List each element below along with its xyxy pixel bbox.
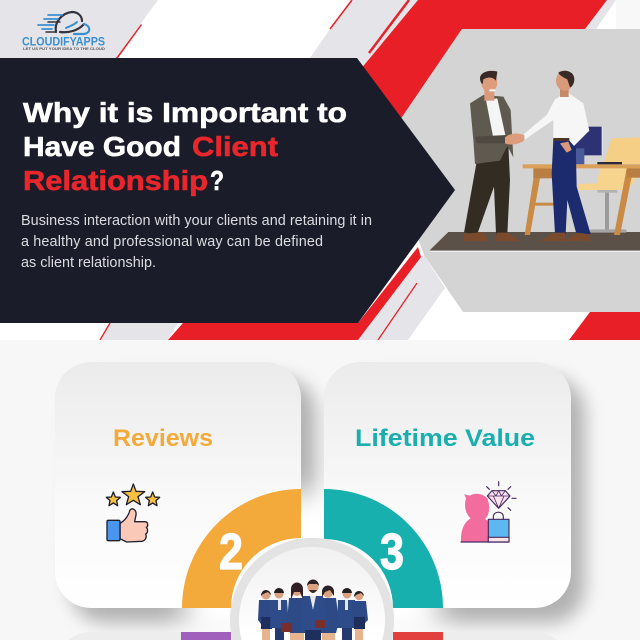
person 4 bbox=[301, 580, 327, 640]
centre glow between the cards bbox=[184, 492, 440, 640]
heading: Reviews: Reviews bbox=[113, 425, 213, 452]
person 7 bbox=[351, 591, 368, 640]
person 6 bbox=[337, 588, 357, 640]
person 1 bbox=[258, 590, 276, 640]
title: Have Good bbox=[23, 131, 181, 162]
segment: purple bbox=[181, 632, 231, 640]
segment 2: orange bbox=[182, 489, 301, 608]
lower right card bbox=[337, 632, 558, 640]
monitor bbox=[575, 127, 603, 164]
heading: Lifetime Value: Lifetime Value bbox=[355, 425, 535, 452]
icon: cloud logo bbox=[38, 12, 89, 34]
panel: Reviews bbox=[55, 362, 301, 608]
logo wordmark: CLOUDIFYAPPS bbox=[22, 36, 105, 48]
dark title panel bbox=[0, 58, 455, 323]
logo tagline: LET US PUT YOUR IDEA TO THE CLOUD bbox=[23, 47, 105, 51]
icon: customer with diamond and bag bbox=[461, 482, 516, 542]
segment: red bbox=[393, 632, 443, 640]
desk bbox=[523, 162, 640, 235]
centre disc bbox=[230, 538, 394, 640]
header background shapes bbox=[0, 0, 640, 120]
person 5 bbox=[318, 585, 339, 640]
title: Relationship bbox=[23, 165, 208, 196]
panel: Lifetime Value bbox=[324, 362, 571, 608]
lower section background bbox=[0, 340, 640, 640]
title: Client bbox=[192, 131, 278, 162]
lower header shapes bbox=[100, 247, 640, 340]
right man bbox=[524, 71, 591, 241]
intro text block: as client relationship. bbox=[21, 255, 156, 271]
intro text block: Business interaction with your clients and retaining it in bbox=[21, 213, 372, 229]
handshake bbox=[505, 133, 524, 145]
card shadows bbox=[70, 377, 585, 623]
title: Why it is Important to bbox=[23, 97, 347, 128]
intro text block: a healthy and professional way can be defined bbox=[21, 234, 323, 250]
chair bbox=[578, 137, 640, 233]
illustration: business team bbox=[258, 580, 368, 640]
floor bbox=[429, 232, 640, 252]
title bbox=[23, 97, 347, 196]
logo bbox=[22, 12, 105, 51]
title: ? bbox=[210, 165, 224, 196]
segment 3: teal bbox=[324, 489, 443, 608]
intro text block bbox=[21, 213, 372, 271]
icon: thumbs up with stars bbox=[106, 484, 160, 542]
person 3 bbox=[281, 582, 309, 640]
lower left card bbox=[68, 632, 288, 640]
left man bbox=[463, 71, 521, 241]
number 2: 2 bbox=[219, 523, 243, 580]
number 3: 3 bbox=[380, 523, 404, 580]
illustration: handshake in office bbox=[429, 71, 640, 252]
person 2 bbox=[270, 588, 289, 640]
photo panel background bbox=[400, 29, 640, 312]
